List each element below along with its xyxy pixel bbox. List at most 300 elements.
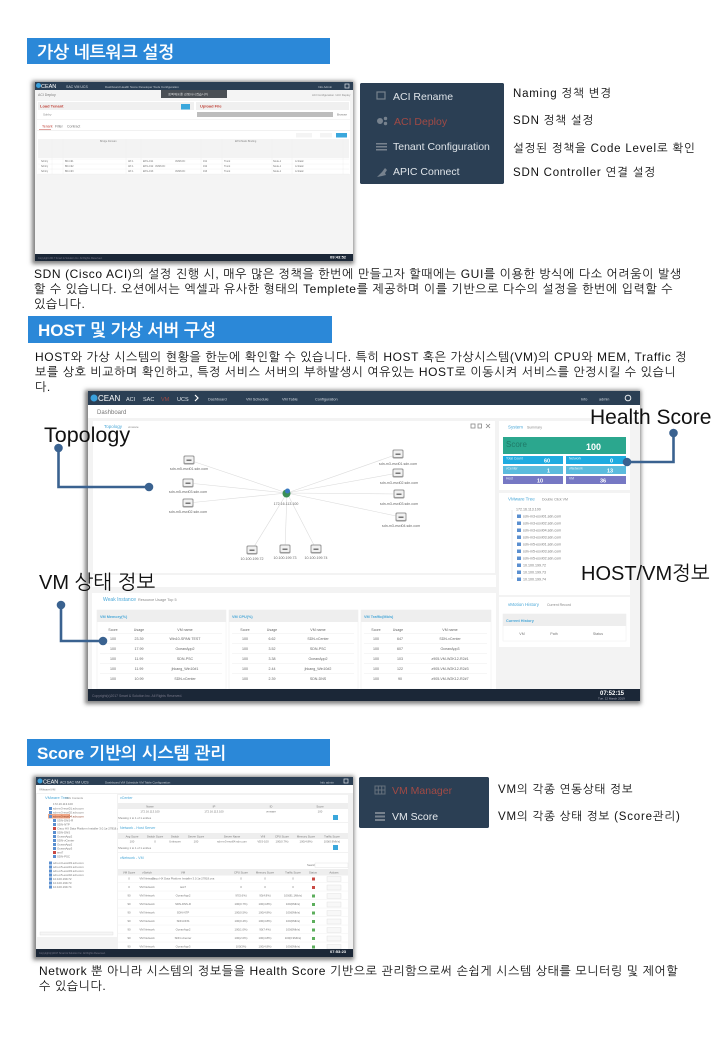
table: VM CPU: VM name xyxy=(310,628,326,632)
panel: network host server: VDS-100 xyxy=(257,840,269,844)
table: VM CPU: VM CPU(%) xyxy=(232,615,253,619)
panel: vNetwork VM table: VM Network xyxy=(139,910,155,914)
screenshot: ACI deploy screen: Sdnlry xyxy=(41,165,49,168)
text block: HOST intro: HOST와 가상 시스템의 현황을 한눈에 확인할 수 있습니다. 특히 HOST 혹은 가상시스템(VM)의 CPU와 MEM, Traffic 정 xyxy=(35,350,687,364)
screenshot: VM score screen: Info admin xyxy=(320,780,334,784)
panel: weak instance: Resource Usage Top 5 xyxy=(138,598,177,602)
screenshot: ACI deploy screen: 191 xyxy=(203,160,208,163)
table: VM CPU: SDN-PSC xyxy=(310,647,326,651)
panel: vNetwork VM table: 100(4.8%) xyxy=(259,944,272,948)
panel: VMware tree list: SDN-vCenter xyxy=(57,838,74,842)
side menu: ACI functions: APIC Connect xyxy=(393,166,460,178)
panel: vCenter: 172.16.113.100 xyxy=(204,810,224,814)
panel: vNetwork VM table: 0 xyxy=(264,876,266,880)
panel: topology: Topology xyxy=(104,424,123,429)
dashboard nav bar: VM Schedule xyxy=(246,398,269,402)
screenshot: ACI deploy screen: Contract xyxy=(67,124,80,128)
text block: health score summary xyxy=(39,964,678,993)
panel: system summary: vNetwork xyxy=(569,466,583,470)
table: VM CPU xyxy=(229,610,358,689)
screenshot: ACI deploy screen: SAC VM UCS xyxy=(66,85,88,89)
panel: vNetwork VM table: 90(7.4%) xyxy=(259,928,271,932)
panel: vCenter: Score xyxy=(316,804,324,808)
screenshot: ACI deploy screen: 정책배포를 진행하시겠습니까 xyxy=(168,92,208,96)
table: VM traffic: 100 xyxy=(373,657,379,661)
panel: vNetwork VM table: test7 xyxy=(180,885,186,889)
panel: vNetwork VM table: 90 xyxy=(127,919,131,923)
side menu: VM functions: VM Manager xyxy=(392,785,453,797)
screenshot: ACI deploy screen: 09:43:52 xyxy=(330,254,347,260)
panel: vCenter: 100 xyxy=(318,810,323,814)
panel: VMware tree list: SDN-PSC xyxy=(57,854,70,858)
side menu: VM functions xyxy=(359,777,489,828)
panel: vNetwork VM table: OceanApp3 xyxy=(176,944,191,948)
screenshot: ACI deploy screen: Trunk xyxy=(224,170,231,173)
panel: network host server: Showing 1 to 1 of 1 entries xyxy=(118,846,152,850)
table: VM traffic: VM name xyxy=(442,628,458,632)
panel: VMware tree: Double Click VM xyxy=(542,498,568,502)
table: VM memory: VM name xyxy=(177,628,193,632)
text block: HOST intro: 보를 상호 비교하며 확인하고, 특정 서비스 서버의 부하발생시 여유있는 HOST로 이동시켜 서비스를 안정시킬 수 있습니 xyxy=(35,365,676,379)
icon: rename xyxy=(377,92,385,99)
dashboard nav bar: Dashboard xyxy=(208,398,227,402)
panel: vCenter: 172.16.113.100 xyxy=(140,810,160,814)
screenshot: ACI deploy screen: EPG-191 xyxy=(143,160,154,163)
panel: vNetwork VM table: VM Network xyxy=(139,919,155,923)
table: VM memory: 17.99 xyxy=(134,647,144,651)
panel: vNetwork VM table: SDN-DNS xyxy=(177,919,190,923)
panel: system summary: 0 xyxy=(610,458,613,464)
table: VM traffic: z905-VM-W2K12-R2#3 xyxy=(431,667,469,671)
dashboard nav bar: UCS xyxy=(177,397,189,403)
panel: network host server: 100 xyxy=(194,840,199,844)
panel: VMware tree: sdn-m3-esxi04.sdn.com xyxy=(523,528,561,532)
panel: system summary: 36 xyxy=(600,478,606,484)
panel: vNetwork VM table: 0 xyxy=(128,885,130,889)
panel: network host server: Memory Score xyxy=(297,834,316,838)
callout label: Topology: Topology xyxy=(44,423,130,447)
table: VM traffic xyxy=(361,610,491,689)
table: VM CPU: Usage xyxy=(267,628,277,632)
panel: vMotion history: vMotion History xyxy=(508,602,540,607)
panel: VMware tree list: sdn-m3-esxi04.sdn.com xyxy=(53,814,84,818)
panel: network host server: Server Name xyxy=(224,834,241,838)
table: VM memory: 11.99 xyxy=(135,667,143,671)
screenshot: ACI deploy screen: A-Static xyxy=(295,165,305,168)
table: VM CPU: SDN-vCenter xyxy=(307,637,329,641)
table: VM traffic: z905-VM-W2K12-R2#1 xyxy=(431,657,469,661)
panel: empty bar xyxy=(92,575,496,587)
panel: network host server xyxy=(118,823,348,852)
panel: vNetwork VM table: 0 xyxy=(292,885,294,889)
panel: VMware tree list: Click Contents xyxy=(65,796,84,800)
panel: VMware tree list: sdn-m5-esxi01.sdn.com xyxy=(53,865,84,869)
panel: vNetwork VM table: SDN-NTP xyxy=(177,910,189,914)
panel: topology: 172.16.113.100 xyxy=(274,502,298,506)
panel: VMware tree list: OceanApp2 xyxy=(57,842,73,846)
description: SDN policy: SDN 정책 설정 xyxy=(513,115,594,127)
panel: weak instance xyxy=(92,593,496,689)
panel: network host server: 100(0.9Mb/s) xyxy=(324,840,340,844)
panel: vNetwork VM table: VM Network xyxy=(139,902,155,906)
panel: system summary: VM xyxy=(569,476,574,480)
panel: vNetwork VM table: 90 xyxy=(127,928,131,932)
table: VM CPU: 2.44 xyxy=(268,667,276,671)
panel: topology: sdn-m5-esxi02.sdn.com xyxy=(169,510,207,514)
screenshot: ACI deploy screen: VMM-DC xyxy=(155,165,165,168)
panel: topology xyxy=(93,421,495,573)
panel: vNetwork VM table: vSwitch xyxy=(142,870,152,874)
table: VM CPU: 3.38 xyxy=(268,657,276,661)
panel: VMware tree: VMware Tree xyxy=(508,496,535,502)
panel: system summary: 60 xyxy=(544,458,550,464)
table: VM traffic: Usage xyxy=(393,628,403,632)
callout label: Health Score: Health Score xyxy=(590,406,711,429)
panel: vCenter: IP xyxy=(213,804,215,808)
screenshot: ACI deploy screen: Load Tenant xyxy=(40,104,64,108)
panel: VMware tree list: sdn-m5-esxi02.sdn.com xyxy=(53,873,84,877)
panel: vNetwork VM table: 90 xyxy=(127,936,131,940)
screenshot: ACI deploy screen: Trunk xyxy=(224,165,231,168)
table: VM CPU: 100 xyxy=(242,647,248,651)
dashboard nav bar: Info xyxy=(581,398,587,402)
panel: vNetwork VM table: VM Network xyxy=(139,894,155,898)
arrow: topology xyxy=(54,444,153,491)
panel: VMware tree list: SDN-DNS xyxy=(57,830,70,834)
table: VM memory: 100 xyxy=(110,677,116,681)
panel: VMware tree list: SDN-DNS-R xyxy=(57,818,73,822)
arrow: health score xyxy=(623,429,678,466)
panel: system summary: Summary xyxy=(527,426,542,430)
table: VM memory: Usage xyxy=(134,628,144,632)
dashboard nav bar: SAC xyxy=(143,397,154,403)
table: VM traffic: 122 xyxy=(397,667,403,671)
panel: vNetwork VM table: VM Score xyxy=(123,870,136,874)
screenshot: ACI deploy screen: Tenant xyxy=(42,124,53,128)
table: VM CPU: 100 xyxy=(242,657,248,661)
screenshot: ACI deploy screen: AP-1 xyxy=(128,170,134,173)
panel: VMware tree: sdn-m5-esxi03.sdn.com xyxy=(523,550,561,554)
panel: vNetwork VM table: 100(4.8%) xyxy=(259,910,272,914)
description: SDN controller: SDN Controller 연결 설정 xyxy=(513,167,656,179)
panel: VMware tree: sdn-m5-esxi02.sdn.com xyxy=(523,556,561,560)
description: VM score: VM의 각종 상태 정보 (Score관리) xyxy=(498,811,681,823)
panel: network host server: Avg Score xyxy=(126,834,139,838)
panel: topology: 10.100.199.72 xyxy=(241,557,263,561)
screenshot: ACI deploy screen: Bridge Domain xyxy=(100,140,117,143)
panel: system summary: Host xyxy=(506,476,513,480)
screenshot: ACI deploy screen: BD-191 xyxy=(65,160,74,163)
panel: vMotion history: Current Record xyxy=(547,603,571,607)
table: VM traffic: 100 xyxy=(373,647,379,651)
screenshot: ACI deploy screen: ACI Deploy xyxy=(38,93,56,97)
screenshot: ACI deploy screen: Trunk xyxy=(224,160,231,163)
panel: vNetwork VM table: 100(0Mb/s) xyxy=(286,910,300,914)
panel: VMware tree list: OceanApp3 xyxy=(57,846,73,850)
panel: VMware tree: 10.100.199.73 xyxy=(523,570,546,574)
screenshot: ACI deploy screen: Copyright 2017 Smart & Solution Inc. All Rights Reserved. xyxy=(38,257,103,260)
panel: vCenter: vCenter xyxy=(120,796,133,800)
panel: vNetwork VM table: VM Network xyxy=(139,876,155,880)
panel: network host server: Switch Score xyxy=(147,834,164,838)
panel: vNetwork VM table: 100(0.4%) xyxy=(235,919,248,923)
panel: vNetwork VM table: 100(3%) xyxy=(236,944,246,948)
panel: system summary: Total Count xyxy=(506,456,523,460)
screenshot: VM score screen: Copyright(c)2017 Smart & Solution Inc. All Rights Reserved. xyxy=(39,952,106,955)
panel: topology: sdn-m3-esxi04.sdn.com xyxy=(382,524,420,528)
panel: vNetwork VM table: 100(1.0%) xyxy=(235,928,248,932)
panel: system summary xyxy=(499,421,630,490)
panel: vNetwork VM table: Status xyxy=(309,870,318,874)
panel: vMotion history: VM xyxy=(519,632,525,636)
heading: Score 기반의 시스템 관리: Score 기반의 시스템 관리 xyxy=(37,744,226,763)
icon: tenant list xyxy=(376,143,387,150)
panel: VMware tree: sdn-m3-esxi01.sdn.com xyxy=(523,514,561,518)
table: VM CPU: 2.39 xyxy=(268,677,276,681)
panel: system summary: 10 xyxy=(537,478,543,484)
panel: VMware tree list: sdn-m3-esxi01.sdn.com xyxy=(53,806,84,810)
panel: vCenter: ID xyxy=(270,804,272,808)
panel: network host server: sdn-m3-esxi04.sdn.com xyxy=(217,840,248,844)
panel: vNetwork VM table: SDN-DNS-R xyxy=(175,902,191,906)
side menu: ACI functions: ACI Deploy xyxy=(394,116,448,128)
table: VM memory: 23.39 xyxy=(134,637,144,641)
text block: SDN intro: 할 수 있습니다. 오션에서는 엑셀과 유사한 형태의 Templete를 제공하며 이를 기반으로 다수의 설정을 한번에 입력할 수 xyxy=(34,282,673,296)
screenshot: ACI deploy screen: EPG-193 xyxy=(143,170,154,173)
panel: network host server: Switch xyxy=(171,834,180,838)
panel: vNetwork VM table: 0 xyxy=(292,876,294,880)
text block: health score summary: Network 뿐 아니라 시스템의 정보들을 Health Score 기반으로 관리함으로써 손쉽게 시스템 상태를 모니터링 및 제어할 xyxy=(39,964,678,978)
panel: VMware tree xyxy=(499,493,630,595)
screenshot: ACI deploy screen: AP-1 xyxy=(128,165,134,168)
panel: vNetwork VM table: 100(81.1Mb/s) xyxy=(284,894,302,898)
screenshot: ACI deploy screen: CEAN xyxy=(41,84,56,90)
panel: system summary: System xyxy=(508,424,523,430)
table: VM memory: VM Memory(%) xyxy=(100,615,128,619)
panel: network host server: 100 xyxy=(130,840,135,844)
screenshot: ACI deploy screen: BD-193 xyxy=(65,170,74,173)
panel: topology: sdn-m5-esxi01.sdn.com xyxy=(170,467,208,471)
panel: network host server: Traffic Score xyxy=(324,834,340,838)
panel: system summary: Score xyxy=(506,440,527,449)
table: VM memory: 11.99 xyxy=(135,657,143,661)
panel: vNetwork VM table: Cisco HX Data Platform Installer 3.0.1a-27818.ova xyxy=(152,876,215,880)
panel: vNetwork VM table: 97(5.6%) xyxy=(235,894,247,898)
panel: VMware tree list: SDN-NTP xyxy=(57,822,70,826)
panel: vNetwork VM table: 100(0Mb/s) xyxy=(286,902,300,906)
screenshot: ACI deploy screen: Node-1 xyxy=(273,165,282,168)
panel: VMware tree list: 172.16.113.100 xyxy=(53,802,73,806)
table: VM memory: 100 xyxy=(110,667,116,671)
panel: VMware tree: sdn-m5-esxi01.sdn.com xyxy=(523,542,561,546)
heading: 가상 네트워크 설정 xyxy=(27,38,330,64)
panel: VMware tree list: test7 xyxy=(57,850,64,854)
table: VM traffic: z905-VM-W2K12-R2#7 xyxy=(431,677,469,681)
panel: vNetwork VM table: 90 xyxy=(127,894,131,898)
text block: HOST intro: 다. xyxy=(35,380,51,394)
description: code level: 설정된 정책을 Code Level로 확인 xyxy=(513,143,696,155)
screenshot: VM dashboard: Dashboard xyxy=(97,410,126,416)
panel: vNetwork VM table: 100(4.8%) xyxy=(259,936,272,940)
screenshot: ACI deploy screen: Upload File xyxy=(200,104,222,108)
panel: vCenter: vmware xyxy=(266,810,276,814)
panel: vNetwork VM table: 100(0.5%) xyxy=(235,910,248,914)
heading: HOST 및 가상 서버 구성 xyxy=(28,316,332,343)
screenshot: VM score screen: 07:53:23 xyxy=(330,949,347,954)
table: VM CPU: 100 xyxy=(242,667,248,671)
icon: deploy gears xyxy=(377,117,387,125)
panel: vNetwork VM table: 100(0.9Mb/s) xyxy=(285,936,301,940)
panel: vCenter: Showing 1 to 1 of 1 entries xyxy=(118,816,152,820)
panel: vNetwork VM table: Actions xyxy=(329,870,339,874)
panel: vNetwork VM table: 100(4.8%) xyxy=(259,902,272,906)
panel: system summary: 13 xyxy=(607,468,613,474)
panel: vNetwork VM table: VM Network xyxy=(139,928,155,932)
heading: 가상 네트워크 설정: 가상 네트워크 설정 xyxy=(37,43,174,62)
panel: vMotion history: Status xyxy=(593,632,603,636)
panel: topology: sdn-m3-esxi02.sdn.com xyxy=(380,481,418,485)
screenshot: ACI deploy screen: A-Static xyxy=(295,160,305,163)
panel: vNetwork VM table: VM Network xyxy=(139,885,155,889)
panel: VMware tree list: sdn-m5-esxi03.sdn.com xyxy=(53,869,84,873)
text block: SDN intro: 있습니다. xyxy=(34,297,85,311)
panel: vCenter xyxy=(118,795,348,822)
screenshot: VM score screen: CEAN xyxy=(43,780,58,786)
screenshot: ACI deploy screen: ACI Configuration / ACI Deploy xyxy=(312,93,351,97)
text block: SDN intro xyxy=(34,267,682,311)
panel: VMware tree list: Cisco HX Data Platform Installer 3.0.1a-27818.ova xyxy=(57,826,122,830)
screenshot: ACI deploy screen: VMM-DC xyxy=(175,170,185,173)
panel: vNetwork VM table: 100(0Mb/s) xyxy=(286,928,300,932)
side menu: ACI functions: ACI Rename xyxy=(393,91,453,103)
panel: system summary: Network xyxy=(569,456,581,460)
panel: topology: sdn-m3-esxi01.sdn.com xyxy=(379,462,417,466)
panel: topology: sdn-m3-esxi03.sdn.com xyxy=(380,502,418,506)
panel: vNetwork VM table: SDN-vCenter xyxy=(175,936,191,940)
panel: topology: 10.100.199.74 xyxy=(305,556,327,560)
screenshot: VM score screen: ACI SAC VM UCS xyxy=(60,780,89,784)
panel: system summary: 1 xyxy=(547,468,550,474)
dashboard nav bar xyxy=(88,391,640,405)
screenshot: ACI deploy screen: Node-1 xyxy=(273,160,282,163)
table: VM CPU: SDN-DNS xyxy=(310,677,327,681)
arrow: VM status xyxy=(57,601,107,645)
panel: vNetwork VM table: 90 xyxy=(127,944,131,948)
panel: vMotion history: Current History xyxy=(506,619,535,623)
callout label: VM 상태 정보: VM 상태 정보 xyxy=(39,572,155,594)
panel: system summary: 100 xyxy=(586,442,601,452)
panel: topology: 10.100.199.73 xyxy=(274,556,296,560)
panel: VMware tree list: 10.100.199.72 xyxy=(53,877,72,881)
screenshot: ACI deploy screen: AP-1 xyxy=(128,160,134,163)
dashboard footer: Tue. 12 March 2019 xyxy=(598,696,625,700)
heading: Score 기반의 시스템 관리 xyxy=(27,739,330,766)
screenshot: VM dashboard xyxy=(88,391,640,701)
panel: VMware tree list: 10.100.199.74 xyxy=(53,885,72,889)
panel: vNetwork VM table: VM xyxy=(181,870,186,874)
screenshot: ACI deploy screen: Dashboard Health Score Developer Tools Configuration xyxy=(105,85,179,89)
table: VM memory: Win10-SPAN TEST xyxy=(169,637,201,641)
panel: VMware tree: 10.100.199.74 xyxy=(523,578,546,582)
panel: vNetwork VM table: Traffic Score xyxy=(285,870,301,874)
table: VM CPU: OceanApp2 xyxy=(309,657,327,661)
dashboard nav bar: ACI xyxy=(126,397,136,403)
panel: vMotion history: Path xyxy=(550,632,558,636)
screenshot: ACI deploy screen: 192 xyxy=(203,165,208,168)
table: VM traffic: SDN-vCenter xyxy=(439,637,461,641)
screenshot: ACI deploy screen: BD-192 xyxy=(65,165,74,168)
panel: vNetwork VM table: VM Network xyxy=(139,936,155,940)
icon: plug xyxy=(377,168,387,177)
table: VM memory: Score xyxy=(108,628,118,632)
screenshot: ACI deploy screen: Sdnlry xyxy=(43,112,52,116)
dashboard footer xyxy=(88,689,640,701)
panel: weak instance: Weak Instance xyxy=(103,597,136,603)
panel: VMware tree list: 10.100.199.73 xyxy=(53,881,72,885)
icon: VM score list xyxy=(375,812,385,821)
panel: vNetwork VM table: OceanApp2 xyxy=(176,928,191,932)
description: VM linkage: VM의 각종 연동상태 정보 xyxy=(498,784,633,796)
panel: vNetwork VM table: Memory Score xyxy=(256,870,275,874)
screenshot: ACI deploy screen: Browse xyxy=(337,112,347,116)
table: VM traffic: VM Traffic(Mb/s) xyxy=(364,615,394,619)
table: VM traffic: 100 xyxy=(373,667,379,671)
callout label: HOST/VM정보: HOST/VM정보 xyxy=(581,563,710,585)
screenshot: ACI deploy screen: Sdnlry xyxy=(41,170,49,173)
panel: vNetwork VM table: 100(4.8%) xyxy=(259,919,272,923)
screenshot: ACI deploy screen: VMM-DC xyxy=(175,160,185,163)
panel: vNetwork VM table: 0 xyxy=(128,876,130,880)
panel: vMotion history xyxy=(499,597,630,647)
dashboard nav bar: CEAN xyxy=(98,394,120,403)
table: VM CPU: jhkang_Win10#2 xyxy=(304,667,331,671)
panel: VMware tree list: OceanApp2 xyxy=(57,834,73,838)
panel: vNetwork VM table: OceanApp2 xyxy=(176,894,191,898)
screenshot: ACI deploy screen: 193 xyxy=(203,170,208,173)
screenshot: ACI deploy screen xyxy=(35,82,353,261)
screenshot: VM score screen: VMware/VM xyxy=(39,788,56,792)
panel: vCenter: Name xyxy=(146,804,154,808)
panel: vNetwork VM table: 90 xyxy=(127,910,131,914)
screenshot: ACI deploy screen: EPG/Static Binding xyxy=(235,140,257,143)
table: VM traffic: 647 xyxy=(397,637,403,641)
table: VM CPU: 100 xyxy=(242,637,248,641)
table: VM CPU: 100 xyxy=(242,677,248,681)
table: VM memory xyxy=(97,610,226,689)
panel: system summary: vCenter xyxy=(506,466,518,470)
panel: network host server: 100(0.7%) xyxy=(276,840,289,844)
panel: VMware tree list: sdn-m3-esxi03.sdn.com xyxy=(53,861,84,865)
panel: vNetwork VM table: 0 xyxy=(240,885,242,889)
panel: topology: vmware xyxy=(128,425,139,429)
panel: vNetwork VM table: 100(0Mb/s) xyxy=(286,944,300,948)
panel: network host server: Unknown xyxy=(169,840,181,844)
table: VM traffic: 90 xyxy=(398,677,402,681)
table: VM traffic: 103 xyxy=(397,657,403,661)
table: VM memory: jhkang_Win10#1 xyxy=(171,667,198,671)
screenshot: ACI deploy screen: Node-1 xyxy=(273,170,282,173)
table: VM memory: SDN-vCenter xyxy=(174,677,196,681)
panel: vNetwork VM table: 0 xyxy=(264,885,266,889)
heading: HOST 및 가상 서버 구성: HOST 및 가상 서버 구성 xyxy=(38,321,216,340)
dashboard nav bar: VM xyxy=(161,397,170,403)
table: VM memory: SDN-PSC xyxy=(177,657,193,661)
icon: VM manager grid xyxy=(375,786,385,794)
table: VM traffic: 607 xyxy=(397,647,403,651)
panel: VMware tree: 10.100.199.72 xyxy=(523,564,546,568)
panel: network host server: CPU Score xyxy=(275,834,289,838)
screenshot: ACI deploy screen: Sdnlry xyxy=(41,160,49,163)
